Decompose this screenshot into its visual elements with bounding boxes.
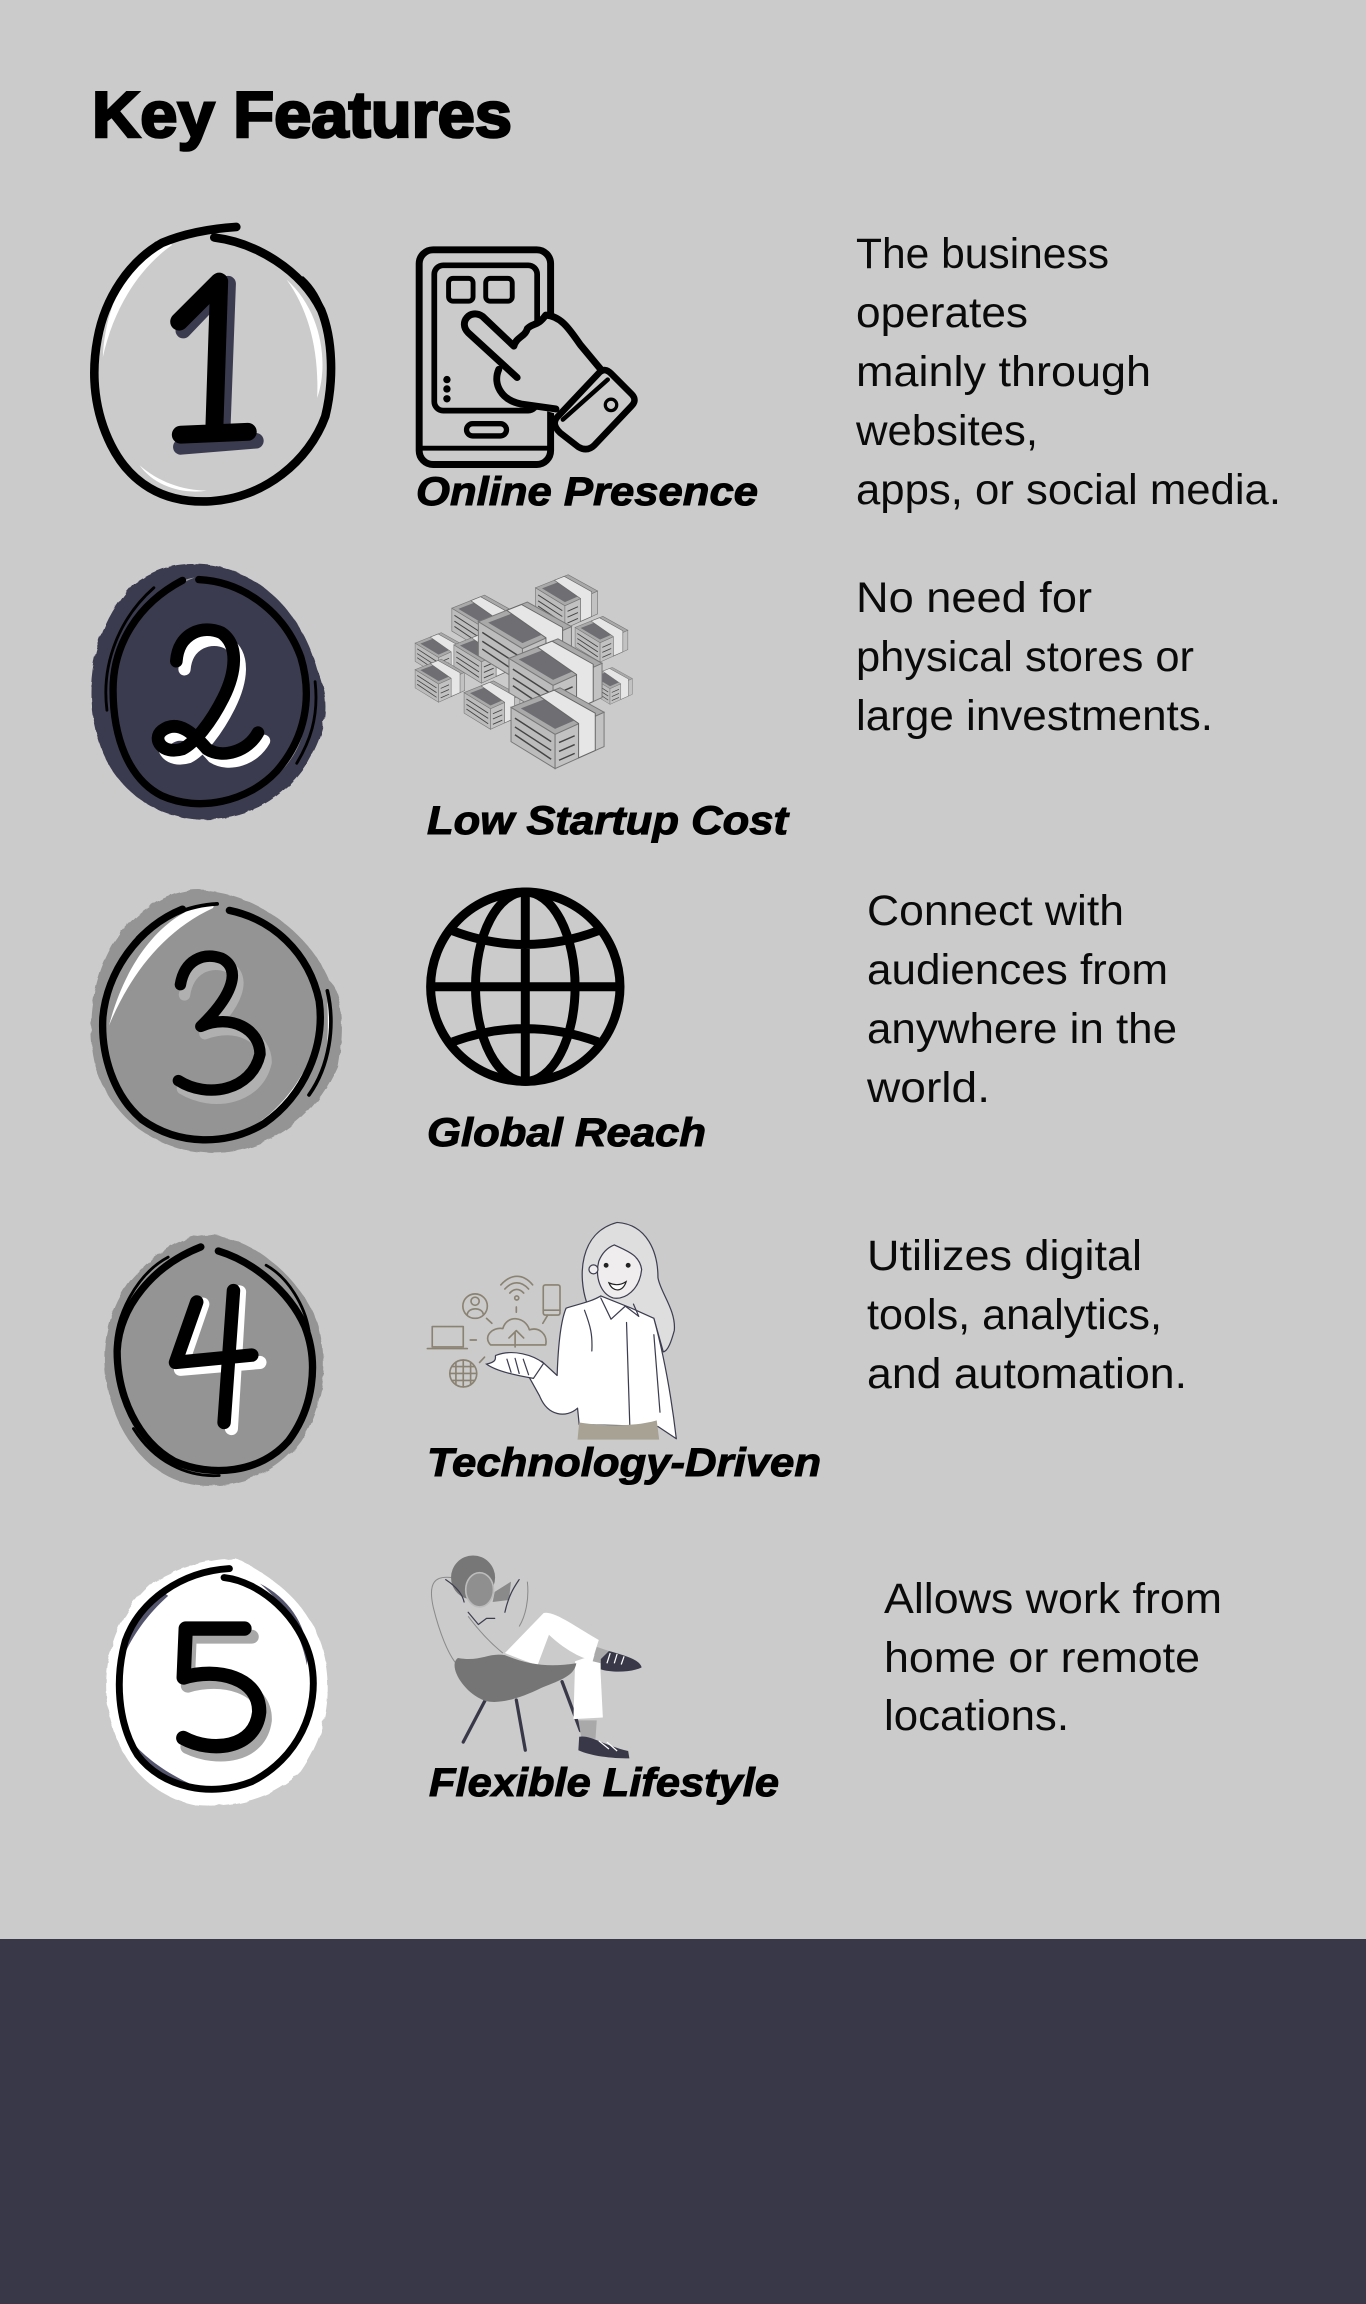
row 5: flexible lifestyle bbox=[106, 1556, 1234, 1806]
row 1: online presence bbox=[94, 227, 1281, 514]
description 4: tools, analytics, bbox=[867, 1291, 1162, 1339]
illustration: person relaxing in chair bbox=[431, 1556, 642, 1758]
tech icons bbox=[488, 1319, 546, 1347]
chair legs bbox=[463, 1682, 580, 1750]
icon: globe bbox=[431, 892, 620, 1081]
description 3: Connect with bbox=[867, 887, 1124, 935]
description 4: and automation. bbox=[867, 1350, 1187, 1398]
hand bbox=[487, 1353, 544, 1378]
description 5: home or remote bbox=[884, 1634, 1200, 1682]
socks and shoes bbox=[593, 1647, 609, 1663]
number badge 2 bbox=[91, 564, 325, 820]
description 1: mainly through bbox=[856, 348, 1151, 396]
icon: stacks of money bbox=[415, 575, 632, 769]
description 2: physical stores or bbox=[856, 633, 1194, 681]
icon: phone with tapping hand bbox=[419, 250, 634, 464]
illustration: woman presenting technology icons bbox=[427, 1222, 676, 1440]
skirt bbox=[578, 1420, 659, 1440]
description 1: apps, or social media. bbox=[856, 466, 1281, 514]
label: technology-driven: Technology-Driven bbox=[427, 1441, 821, 1485]
description 1: operates bbox=[856, 289, 1028, 337]
bottom band bbox=[0, 1939, 1366, 2304]
label: global reach: Global Reach bbox=[427, 1111, 706, 1155]
number badge 1 bbox=[94, 227, 331, 503]
hair bbox=[582, 1222, 674, 1352]
description 3: world. bbox=[866, 1064, 990, 1112]
shirt outline bbox=[431, 1577, 528, 1663]
face bbox=[598, 1245, 642, 1298]
label: online presence: Online Presence bbox=[416, 470, 758, 514]
description 1: websites, bbox=[855, 407, 1038, 455]
title: Key Features bbox=[92, 78, 512, 151]
description 3: audiences from bbox=[867, 946, 1168, 994]
row 4: technology-driven bbox=[104, 1222, 1187, 1486]
number badge 3 bbox=[91, 890, 341, 1153]
head bbox=[466, 1573, 493, 1607]
number badge 4 bbox=[104, 1235, 323, 1486]
arms bbox=[446, 1580, 519, 1612]
description 5: Allows work from bbox=[884, 1575, 1222, 1623]
description 3: anywhere in the bbox=[867, 1005, 1177, 1053]
row 3: global reach bbox=[91, 887, 1189, 1155]
hair bbox=[451, 1556, 495, 1600]
white trousers bbox=[505, 1613, 599, 1665]
chair seat bbox=[455, 1655, 576, 1702]
description 2: large investments. bbox=[856, 692, 1213, 740]
label: flexible lifestyle: Flexible Lifestyle bbox=[429, 1761, 779, 1805]
number badge 5 bbox=[106, 1558, 328, 1806]
description 2: No need for bbox=[856, 574, 1092, 622]
description 5: locations. bbox=[884, 1692, 1069, 1740]
description 1: The business bbox=[856, 230, 1109, 278]
shirt bbox=[529, 1296, 676, 1439]
description 4: Utilizes digital bbox=[867, 1232, 1142, 1280]
label: low startup cost: Low Startup Cost bbox=[427, 799, 790, 843]
row 2: low startup cost bbox=[91, 564, 1213, 843]
